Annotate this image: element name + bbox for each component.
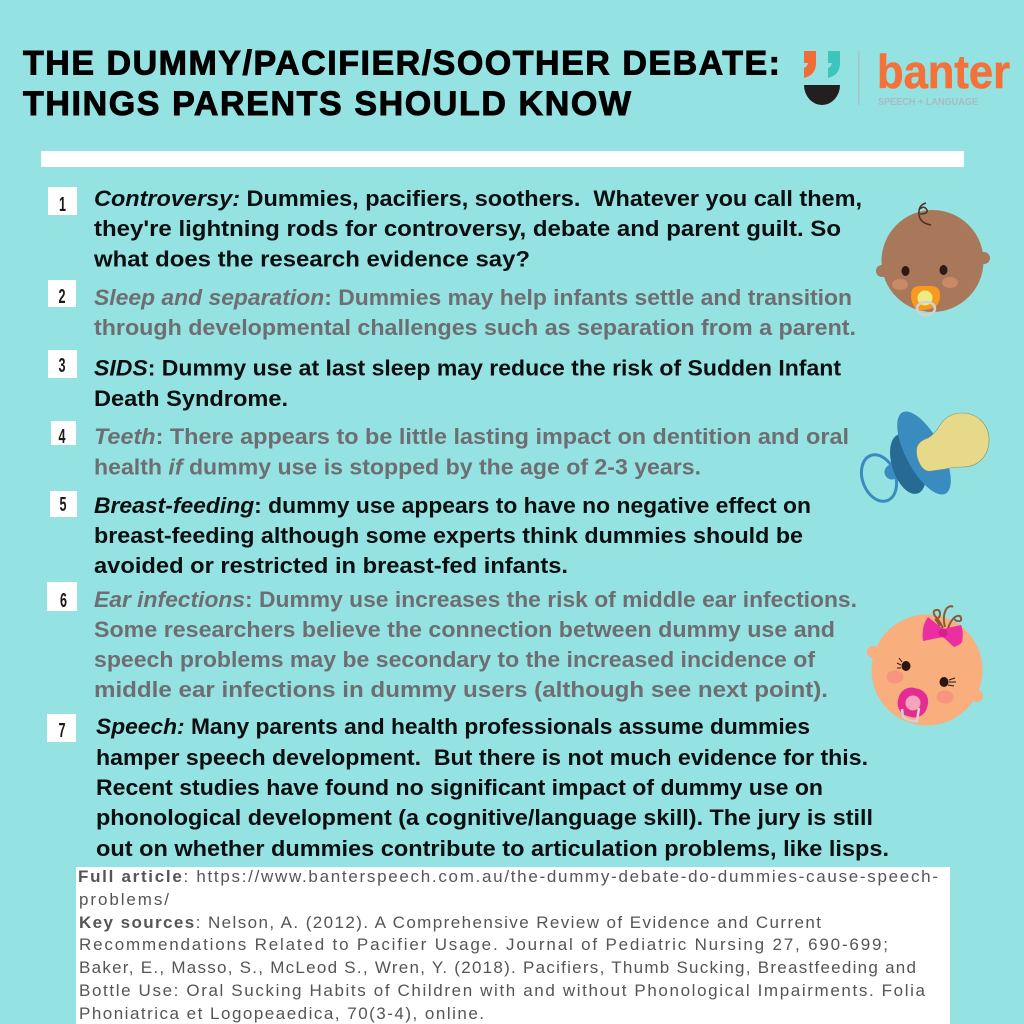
point 1: controversy: they're lightning rods for controversy, debate and parent guilt. So (94, 216, 841, 241)
point 6: ear infections: Ear infections: Dummy use increases the risk of middle ear infections. (94, 587, 857, 612)
number badges: 2 (58, 286, 66, 308)
icon: baby girl with bow and pink dummy (867, 606, 983, 726)
title: THINGS PARENTS SHOULD KNOW (23, 85, 632, 123)
point 6: ear infections: speech problems may be secondary to the increased incidence of (94, 647, 816, 672)
footer: sources panel: Baker, E., Masso, S., McLeod S., Wren, Y. (2018). Pacifiers, Thumb Sucking, Breastfeeding and (79, 958, 916, 977)
point 2: sleep and separation: through developmental challenges such as separation from a parent. (94, 315, 856, 340)
point 5: breast-feeding: breast-feeding although some experts think dummies should be (94, 523, 803, 548)
point 7: speech (96, 714, 889, 861)
number badges: 1 (59, 194, 66, 216)
footer: sources panel: Full article: https://www.banterspeech.com.au/the-dummy-debate-do-dummies-cause-speech- (78, 867, 938, 886)
footer: sources panel: problems/ (79, 890, 169, 909)
logo: banter speech and language: banter (877, 45, 1010, 98)
footer: sources panel (76, 867, 950, 1024)
number badges (47, 187, 77, 742)
point 7: speech: Speech: Many parents and health professionals assume dummies (96, 714, 810, 739)
point 2: sleep and separation (94, 285, 856, 340)
point 6: ear infections: middle ear infections in dummy users (although see next point). (94, 677, 828, 702)
point 7: speech: phonological development (a cognitive/language skill). The jury is still (96, 805, 873, 830)
title (23, 44, 780, 123)
point 4: teeth: Teeth: There appears to be little lasting impact on dentition and oral (94, 424, 849, 449)
logo: banter speech and language (804, 45, 1010, 108)
number badges: 6 (60, 590, 67, 612)
icon: baby with dark skin and orange dummy (876, 203, 990, 315)
number badges: 7 (58, 720, 66, 742)
point 5: breast-feeding: Breast-feeding: dummy use appears to have no negative effect on (94, 493, 811, 518)
point 4: teeth (94, 424, 849, 480)
point 6: ear infections (94, 587, 857, 702)
white divider bar (41, 151, 964, 167)
footer: sources panel: Recommendations Related to Pacifier Usage. Journal of Pediatric Nursing 27, 690-699; (79, 935, 888, 954)
number badges: 5 (60, 494, 66, 516)
number badges: 4 (58, 426, 66, 448)
footer: sources panel: Phoniatrica et Logopeaedica, 70(3-4), online. (79, 1004, 484, 1023)
logo: banter speech and language: SPEECH + LANGUAGE (878, 97, 978, 108)
footer: sources panel: Key sources: Nelson, A. (2012). A Comprehensive Review of Evidence and Current (79, 913, 821, 932)
point 1: controversy: what does the research evidence say? (93, 246, 530, 272)
number badges: 3 (58, 355, 66, 377)
point 1: controversy: Controversy: Dummies, pacifiers, soothers. Whatever you call them, (94, 186, 862, 211)
point 2: sleep and separation: Sleep and separation: Dummies may help infants settle and transition (94, 285, 852, 310)
icon: blue dummy (855, 404, 989, 506)
point 1: controversy (93, 186, 862, 272)
point 4: teeth: health if dummy use is stopped by the age of 2-3 years. (94, 454, 701, 480)
point 5: breast-feeding: avoided or restricted in breast-fed infants. (94, 553, 568, 578)
point 7: speech: Recent studies have found no significant impact of dummy use on (96, 775, 823, 800)
point 3: SIDS: Death Syndrome. (94, 386, 288, 411)
point 7: speech: hamper speech development. But there is not much evidence for this. (96, 745, 868, 770)
point 6: ear infections: Some researchers believe the connection between dummy use and (94, 617, 835, 642)
point 3: SIDS: SIDS: Dummy use at last sleep may reduce the risk of Sudden Infant (94, 356, 842, 380)
title: THE DUMMY/PACIFIER/SOOTHER DEBATE: (23, 44, 780, 82)
point 7: speech: out on whether dummies contribute to articulation problems, like lisps. (96, 836, 889, 861)
point 3: SIDS (94, 356, 842, 411)
footer: sources panel: Bottle Use: Oral Sucking Habits of Children with and without Phonological Impairments. Folia (79, 981, 926, 1000)
point 5: breast-feeding (94, 493, 811, 578)
